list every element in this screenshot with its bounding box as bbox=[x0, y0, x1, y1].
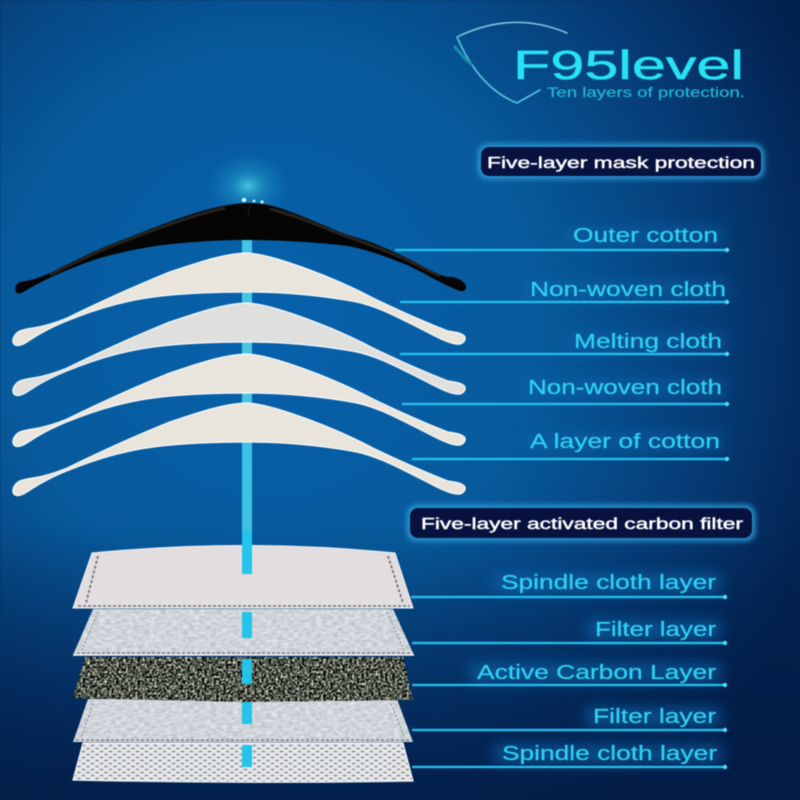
label: outer cotton bbox=[395, 225, 729, 252]
filter layer: active carbon bbox=[73, 657, 413, 702]
heading: five-layer activated carbon filter: Five-layer activated carbon filter bbox=[421, 516, 744, 533]
label: outer cotton: Outer cotton bbox=[573, 225, 718, 247]
logo: shield outline bbox=[455, 22, 567, 103]
dash bbox=[242, 612, 252, 638]
label: spindle cloth layer bbox=[411, 572, 727, 599]
filter layer: spindle cloth bottom bbox=[73, 743, 413, 782]
label: filter layer: Filter layer bbox=[593, 706, 716, 728]
heading: five-layer mask protection: Five-layer mask protection bbox=[487, 155, 755, 172]
filter layer: filter upper bbox=[73, 609, 414, 655]
label: filter layer bbox=[412, 619, 727, 645]
label: non-woven cloth bbox=[402, 377, 729, 406]
heading: five-layer mask protection bbox=[478, 144, 764, 179]
title: F95level bbox=[513, 42, 744, 88]
label: filter layer bbox=[412, 706, 727, 732]
label: non-woven cloth: Non-woven cloth bbox=[530, 279, 726, 301]
label: melting cloth bbox=[400, 331, 729, 356]
label: melting cloth: Melting cloth bbox=[574, 331, 722, 353]
label: spindle cloth layer bbox=[412, 743, 727, 769]
label: active carbon layer: Active Carbon Layer bbox=[477, 662, 716, 684]
dash bbox=[242, 745, 252, 767]
title bbox=[513, 42, 745, 100]
label: active carbon layer bbox=[412, 662, 727, 687]
dash bbox=[242, 659, 252, 684]
filter layer: filter lower bbox=[73, 699, 413, 742]
mask layer: a layer of cotton bbox=[13, 403, 465, 496]
label: filter layer: Filter layer bbox=[595, 619, 716, 641]
mask layer: non-woven cloth bbox=[13, 253, 465, 346]
heading: five-layer activated carbon filter bbox=[407, 505, 755, 541]
label: non-woven cloth bbox=[400, 279, 729, 304]
label: a layer of cotton: A layer of cotton bbox=[530, 431, 720, 453]
label: spindle cloth layer: Spindle cloth layer bbox=[502, 743, 717, 765]
mask layer: non-woven cloth bbox=[13, 354, 465, 447]
dash bbox=[242, 530, 252, 574]
central light beam bbox=[206, 152, 290, 534]
mask layer: melting cloth bbox=[13, 303, 465, 396]
label: a layer of cotton bbox=[412, 431, 729, 461]
subtitle: Ten layers of protection. bbox=[547, 84, 745, 100]
label: non-woven cloth: Non-woven cloth bbox=[528, 377, 722, 399]
mask layer: black outer cotton bbox=[15, 203, 466, 294]
label: spindle cloth layer: Spindle cloth layer bbox=[501, 572, 716, 594]
dash bbox=[242, 702, 252, 724]
filter layer: spindle cloth top bbox=[73, 530, 413, 608]
